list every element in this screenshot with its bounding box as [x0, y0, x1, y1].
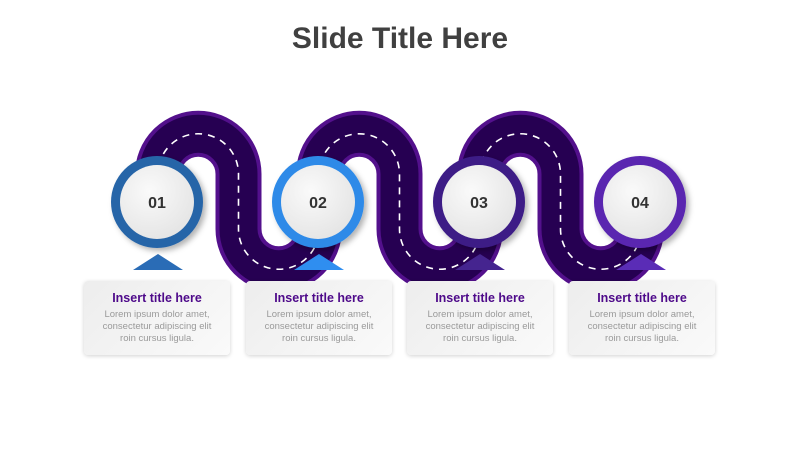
card 2 — [246, 281, 392, 355]
marker 02: 02 — [309, 195, 327, 212]
title: Slide Title Here — [292, 22, 508, 55]
card 4: consectetur adipiscing elit — [588, 321, 696, 332]
card 1 — [84, 281, 230, 355]
marker 03: 03 — [470, 195, 488, 212]
card 1: roin cursus ligula. — [120, 333, 194, 344]
card 4: Insert title here — [597, 291, 687, 305]
card 4 — [569, 281, 715, 355]
card 3: Lorem ipsum dolor amet, — [427, 309, 533, 320]
marker 04: 04 — [631, 195, 649, 212]
marker 04 — [594, 156, 686, 248]
marker 01: 01 — [148, 195, 166, 212]
card 2: Insert title here — [274, 291, 364, 305]
card 4: Lorem ipsum dolor amet, — [589, 309, 695, 320]
card 3: roin cursus ligula. — [443, 333, 517, 344]
card 2: roin cursus ligula. — [282, 333, 356, 344]
card 1: Insert title here — [112, 291, 202, 305]
road — [158, 134, 641, 269]
triangles — [133, 254, 666, 270]
marker 01 — [111, 156, 203, 248]
marker 02 — [272, 156, 364, 248]
card 3: Insert title here — [435, 291, 525, 305]
card 1: Lorem ipsum dolor amet, — [104, 309, 210, 320]
card 2: Lorem ipsum dolor amet, — [266, 309, 372, 320]
card 3: consectetur adipiscing elit — [426, 321, 534, 332]
card 1: consectetur adipiscing elit — [103, 321, 211, 332]
card 4: roin cursus ligula. — [605, 333, 679, 344]
card 2: consectetur adipiscing elit — [265, 321, 373, 332]
card 3 — [407, 281, 553, 355]
marker 03 — [433, 156, 525, 248]
